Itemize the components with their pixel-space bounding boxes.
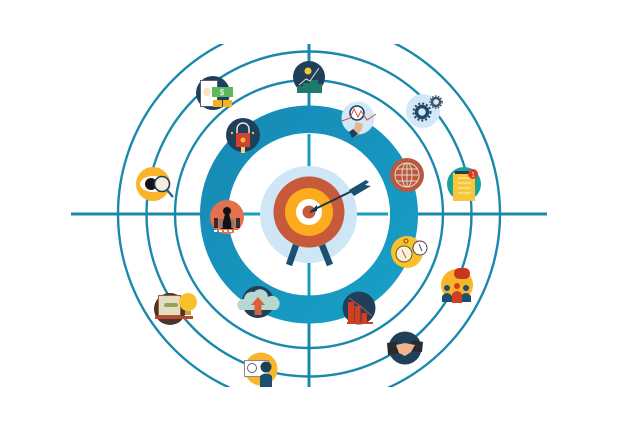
icon: money xyxy=(196,76,233,110)
icon: checklist: 1 xyxy=(471,172,475,178)
arrow xyxy=(309,180,371,213)
target xyxy=(260,166,371,265)
icon: team meeting xyxy=(441,268,473,303)
icon: presenter xyxy=(244,352,278,387)
icon: people silhouettes xyxy=(210,200,244,234)
inner white disc xyxy=(228,133,390,295)
icon: lightbulb and laptop xyxy=(154,293,197,325)
inner crosshair xyxy=(230,134,388,295)
icon: handshake xyxy=(387,332,423,364)
icon: eye and magnifier xyxy=(136,167,173,201)
icon: stopwatches xyxy=(391,236,427,268)
icon: checklist xyxy=(447,167,481,201)
icon: money: $ xyxy=(220,88,225,97)
thick blue ring xyxy=(214,120,404,310)
icon: magnified chart xyxy=(342,102,376,138)
icon: globe xyxy=(390,158,424,192)
concentric rings and crosshair xyxy=(71,44,547,387)
icon: gears xyxy=(406,94,442,128)
icon: growth chart xyxy=(293,61,325,93)
icon: falling bar chart xyxy=(342,292,376,324)
target strategy diagram xyxy=(71,44,547,387)
icon: lock xyxy=(226,118,260,153)
icon: cloud upload xyxy=(237,286,280,318)
